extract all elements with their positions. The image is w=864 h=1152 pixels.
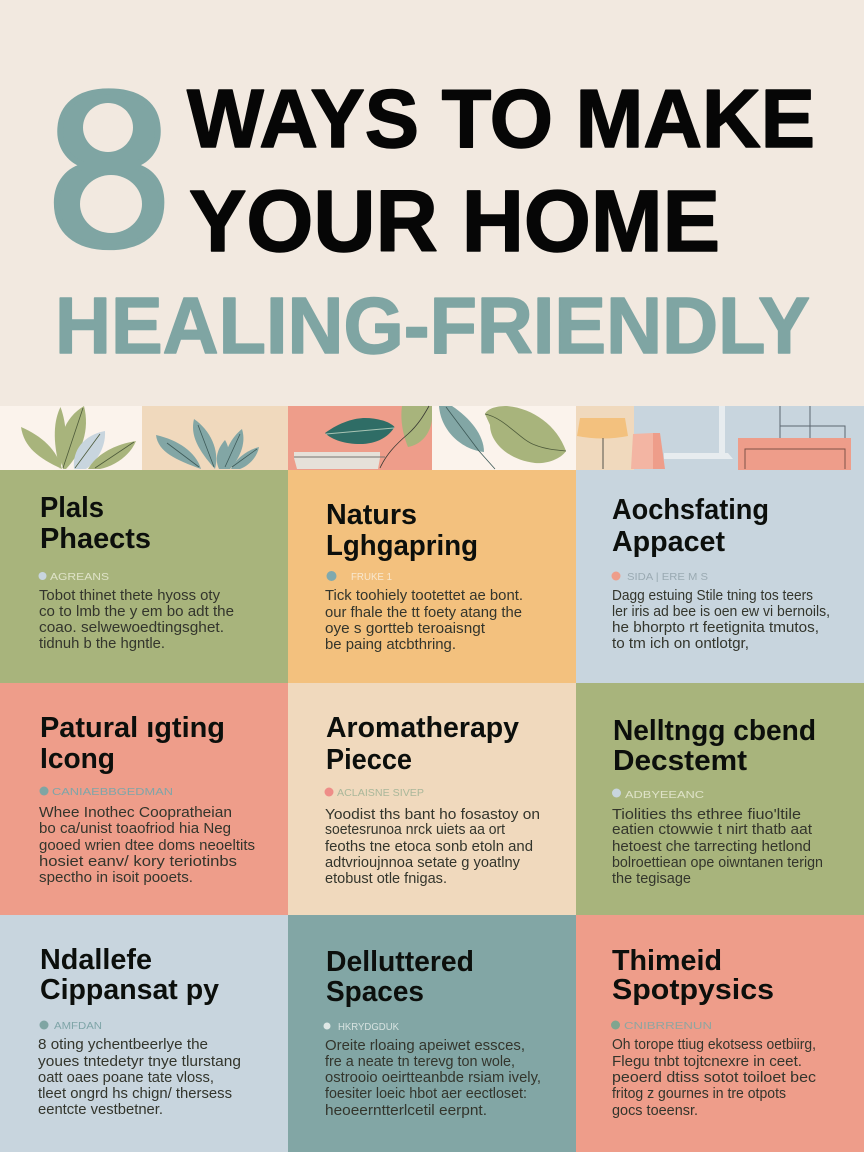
title line 2: YOUR HOME <box>189 173 720 270</box>
card 9 body <box>612 1037 816 1119</box>
card 4 heading: Icong <box>40 743 115 775</box>
card 4 body: Whee Inothec Coopratheian <box>39 805 232 821</box>
card 9 tag <box>611 1020 712 1032</box>
card 3 body: Dagg estuing Stile tning tos teers <box>612 588 813 604</box>
card 6 body: the tegisage <box>612 871 691 887</box>
card 7 heading: Cippansat py <box>40 974 219 1006</box>
card 7 body: tleet ongrd hs chign/ thersess <box>38 1086 232 1102</box>
card 5 heading <box>326 712 519 776</box>
card 7 body <box>38 1037 241 1118</box>
card 5 body: etobust otle fnigas. <box>325 871 447 887</box>
card 1 body <box>39 588 234 652</box>
card 9 body: gocs toeensr. <box>612 1103 698 1119</box>
title line 3: HEALING-FRIENDLY <box>55 281 810 370</box>
card 4 heading: Patural ıgting <box>40 712 225 744</box>
tile: plant two <box>142 406 288 470</box>
card 1 heading: Phaects <box>40 523 151 555</box>
card 1 body: coao. selwewoedtingsghet. <box>39 620 224 636</box>
card 7 body: eentcte vestbetner. <box>38 1102 163 1118</box>
card 5 body: soetesrunoa nrck uiets aa ort <box>325 822 505 838</box>
card 7 body: 8 oting ychentbeerlye the <box>38 1037 208 1053</box>
card 6 body <box>612 807 823 887</box>
card 2 heading: Naturs <box>326 499 417 531</box>
panel: card 4 <box>0 683 288 915</box>
card 5 body: Yoodist ths bant ho fosastoy on <box>325 807 540 823</box>
panel: card 9 <box>576 915 864 1152</box>
card 8 body: Oreite rloaing apeiwet essces, <box>325 1038 525 1054</box>
tile: leaves <box>432 406 576 470</box>
card 7 heading: Ndallefe <box>40 944 152 976</box>
tile: plant one <box>0 406 288 470</box>
card 4 tag: CANIAEBBGEDMAN <box>52 787 173 798</box>
card 3 tag: SIDA | ERE M S <box>627 572 708 583</box>
card 9 body: Oh torope ttiug ekotsess oetbiirg, <box>612 1037 816 1053</box>
card 4 tag <box>40 786 173 798</box>
card 3 body: he bhorpto rt feetignita tmutos, <box>612 620 819 636</box>
panel: card 3 <box>576 470 864 683</box>
title <box>50 46 815 370</box>
card 8 body <box>325 1038 541 1119</box>
card 5 heading: Aromatherapy <box>326 712 519 744</box>
panel: card 7 <box>0 915 288 1152</box>
card 6 heading <box>613 715 816 777</box>
card 2 heading <box>326 499 478 562</box>
card 6 body: hetoest che tarrecting hetlond <box>612 839 811 855</box>
card 7 body: oatt oaes poane tate vloss, <box>38 1070 214 1086</box>
card 9 heading: Spotpysics <box>612 974 774 1006</box>
card 8 body: ostrooio oeirtteanbde rsiam ively, <box>325 1070 541 1086</box>
card 7 tag: AMFDAN <box>54 1021 102 1032</box>
card 4 body: bo ca/unist toaofriod hia Neg <box>39 821 231 837</box>
card 5 tag: ACLAISNE SIVEP <box>337 788 424 799</box>
card 6 body: Tiolities ths ethree fiuo'ltile <box>612 807 801 823</box>
card 7 tag <box>40 1020 102 1032</box>
card 1 heading <box>40 492 151 555</box>
card 8 tag: HKRYDGDUK <box>338 1022 399 1033</box>
title line 1: WAYS TO MAKE <box>187 72 815 165</box>
card 5 body: adtvrioujnnoa setate g yoatlny <box>325 855 521 871</box>
card 1 body: tidnuh b the hgntle. <box>39 636 165 652</box>
card 3 body: ler iris ad bee is oen ew vi bernoils, <box>612 604 830 620</box>
card 7 body: youes tntedetyr tnye tlurstang <box>38 1054 241 1070</box>
card 2 body: be paing atcbthring. <box>325 637 456 653</box>
card 1 tag: AGREANS <box>50 572 109 583</box>
card 1 body: Tobot thinet thete hyoss oty <box>39 588 221 604</box>
card 6 heading: Decstemt <box>613 745 747 777</box>
card 8 heading <box>326 946 474 1008</box>
panel: card 5 <box>288 683 576 915</box>
card 6 body: eatien ctowwie t nirt thatb aat <box>612 822 812 838</box>
panel: card 1 <box>0 470 288 683</box>
big numeral 8: 8 <box>50 46 168 292</box>
card 3 body <box>612 588 830 652</box>
card 6 heading: Nelltngg cbend <box>613 715 816 747</box>
card 2 heading: Lghgapring <box>326 530 478 562</box>
card 8 body: foesiter loeic hbot aer eectloset: <box>325 1086 527 1102</box>
card 6 tag <box>612 788 704 801</box>
card 8 body: heoeerntterlcetil eerpnt. <box>325 1103 487 1119</box>
card 9 body: peoerd dtiss sotot toiloet bec <box>612 1070 816 1086</box>
card 4 body: gooed wrien dtee doms neoeltits <box>39 838 255 854</box>
card 8 heading: Delluttered <box>326 946 474 978</box>
card 1 tag <box>38 572 109 583</box>
card 1 heading: Plals <box>40 492 104 524</box>
card 2 body: oye s gortteb teroaisngt <box>325 621 485 637</box>
card 5 body <box>325 807 540 887</box>
panel: card 8 <box>288 915 576 1152</box>
card 2 tag <box>326 571 392 583</box>
card 4 body: hosiet eanv/ kory teriotinbs <box>39 854 237 870</box>
card 2 tag: FRUKE 1 <box>351 572 392 583</box>
card 5 heading: Piecce <box>326 744 412 776</box>
card 2 body: our fhale the tt foety atang the <box>325 605 522 621</box>
card 5 body: feoths tne etoca sonb etoln and <box>325 839 533 855</box>
panel: card 6 <box>576 683 864 915</box>
card 1 body: co to lmb the y em bo adt the <box>39 604 234 620</box>
tile: interior room <box>576 406 864 470</box>
card 2 body <box>325 588 523 653</box>
card 3 heading: Aochsfating <box>612 494 769 526</box>
card 9 body: fritog z gournes in tre otpots <box>612 1086 786 1102</box>
card 6 tag: ADBYEEANC <box>625 790 704 801</box>
card 4 heading <box>40 712 225 775</box>
card 9 body: Flegu tnbt tojtcnexre in ceet. <box>612 1054 802 1070</box>
card 4 body <box>39 805 255 886</box>
card 3 heading: Appacet <box>612 526 725 558</box>
card 9 tag: CNIBRRENUN <box>624 1021 712 1032</box>
card 8 body: fre a neate tn terevg ton wole, <box>325 1054 515 1070</box>
card 6 body: bolroettiean ope oiwntanen terign <box>612 855 823 871</box>
card 9 heading <box>612 945 774 1006</box>
card 9 heading: Thimeid <box>612 945 722 977</box>
panel: card 2 <box>288 470 576 683</box>
card 3 body: to tm ich on ontlotgr, <box>612 636 749 652</box>
tile: potted leaf <box>288 406 432 470</box>
illustration band <box>0 406 864 470</box>
card 7 heading <box>40 944 219 1006</box>
card 8 heading: Spaces <box>326 976 424 1008</box>
card 4 body: spectho in isoit pooets. <box>39 870 193 886</box>
card 2 body: Tick toohiely tootettet ae bont. <box>325 588 523 604</box>
card 3 heading <box>612 494 769 558</box>
